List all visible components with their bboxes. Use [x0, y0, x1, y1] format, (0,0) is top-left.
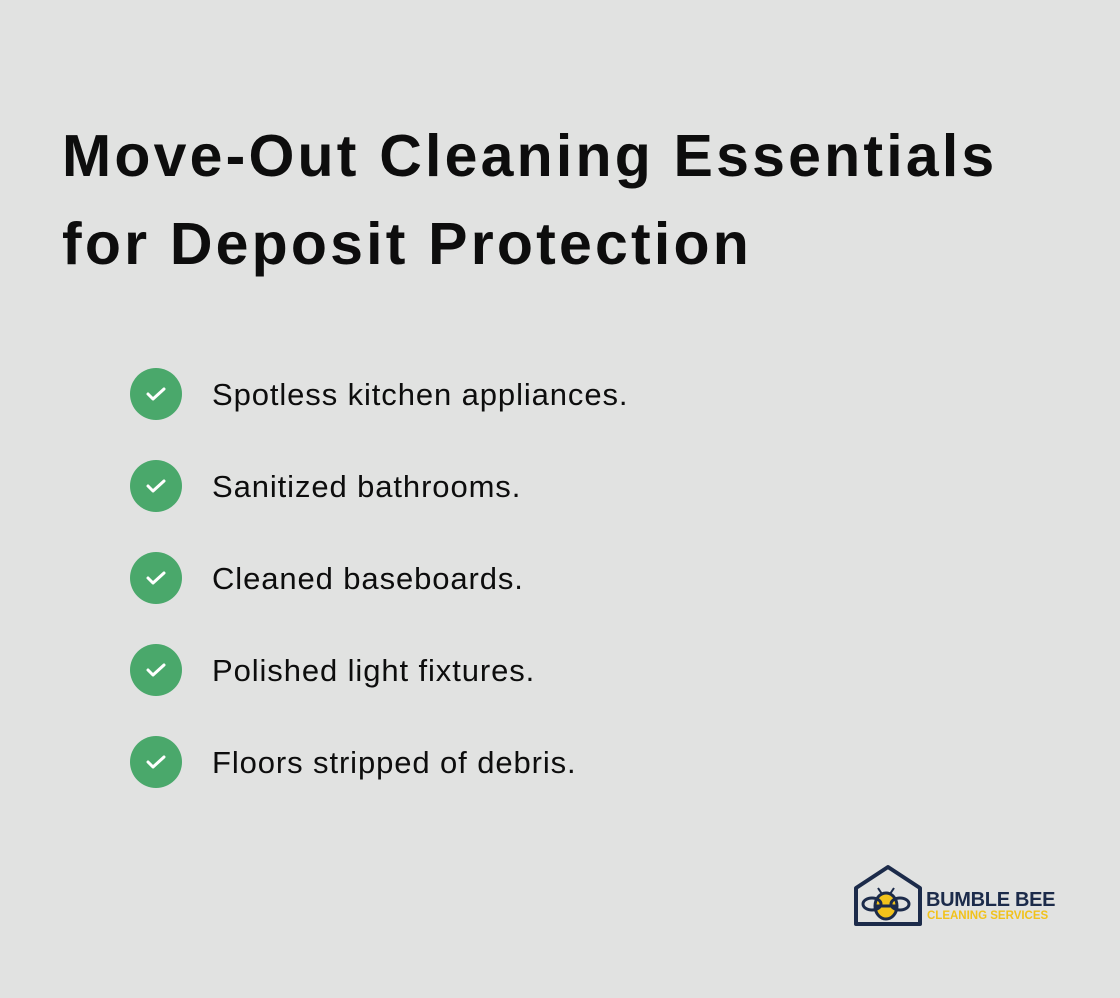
logo: CLEANING SERVICES — [927, 910, 1048, 922]
item: kitchen: Spotless kitchen appliances. — [212, 377, 628, 412]
item: baseboards — [130, 552, 524, 604]
title: Move-Out Cleaning Essentials — [62, 123, 997, 189]
item: bathrooms — [130, 460, 521, 512]
title: for Deposit Protection — [62, 211, 752, 277]
item: light fixtures: Polished light fixtures. — [212, 653, 535, 688]
logo text: BUMBLE BEE — [926, 889, 1055, 911]
item: floors: Floors stripped of debris. — [212, 745, 577, 780]
logo — [854, 865, 1055, 926]
icon: bee house — [854, 865, 922, 926]
item: baseboards: Cleaned baseboards. — [212, 561, 524, 596]
item: light fixtures — [130, 644, 535, 696]
title — [62, 123, 997, 277]
item: floors — [130, 736, 577, 788]
item: kitchen — [130, 368, 628, 420]
item: bathrooms: Sanitized bathrooms. — [212, 469, 521, 504]
